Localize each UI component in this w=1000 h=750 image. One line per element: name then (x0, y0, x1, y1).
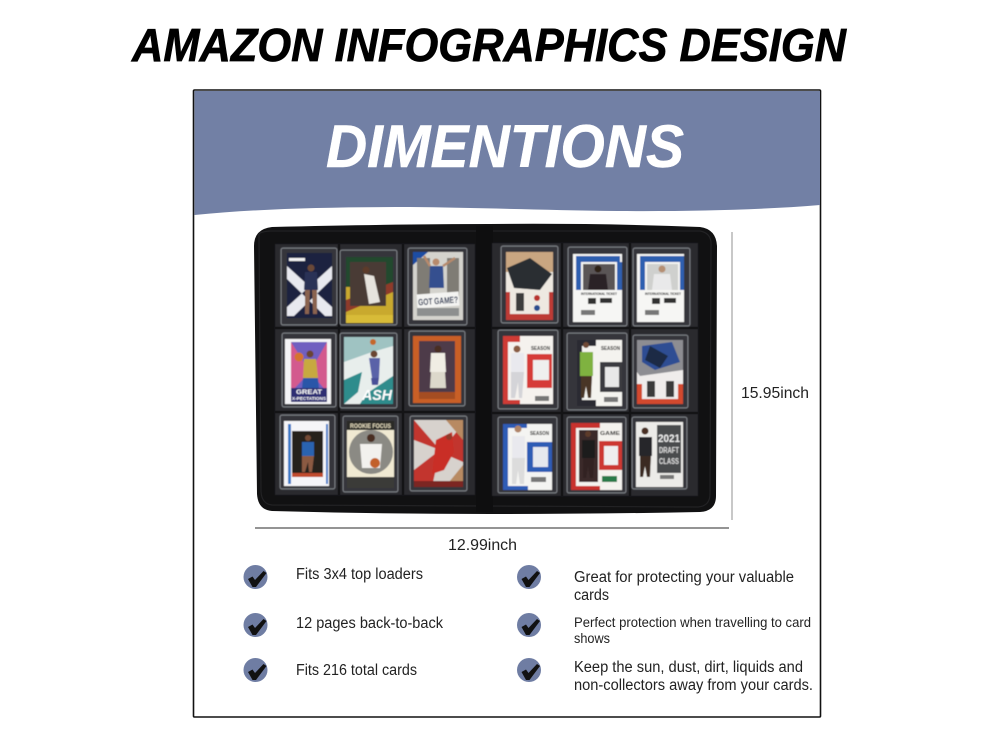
card r3c5: GAME (600, 431, 621, 437)
card r2c1: X-PECTATIONS (292, 396, 326, 401)
card r3c6 (632, 417, 687, 489)
card r1c4 (501, 246, 558, 323)
panel: dimensions card (194, 90, 820, 717)
feature: protecting: Great for protecting your valuable (574, 569, 794, 586)
card r2c2 (340, 333, 397, 408)
card r3c6: 2021 (658, 433, 680, 445)
card r3c3 (410, 416, 467, 491)
card r3c4 (498, 417, 557, 493)
right page sleeves (492, 243, 698, 496)
feature: keep away (574, 659, 813, 694)
feature: travelling: Perfect protection when travelling to card (574, 614, 811, 630)
height label: 15.95inch (741, 385, 809, 402)
card r2c6 (633, 335, 688, 408)
card r1c6 (633, 248, 690, 326)
feature: travelling (574, 614, 811, 646)
feature list (244, 565, 813, 694)
card r2c1 (282, 333, 336, 407)
width label: 12.99inch (448, 537, 517, 554)
icon: check 6 (517, 658, 541, 682)
icon: check 3 (244, 658, 268, 682)
binder case (254, 224, 717, 514)
feature: keep away: Keep the sun, dust, dirt, liquids and (574, 659, 803, 676)
feature: pages: 12 pages back-to-back (296, 615, 443, 632)
card r3c4: SEASON (530, 431, 549, 437)
height dimension line (731, 232, 733, 520)
feature: total cards: Fits 216 total cards (296, 662, 417, 679)
card r1c2 (340, 250, 397, 325)
icon: check 4 (517, 565, 541, 589)
card r1c6: INTERNATIONAL TICKET (645, 292, 682, 296)
title: AMAZON INFOGRAPHICS DESIGN (131, 19, 847, 71)
card r2c4 (498, 330, 558, 409)
card r1c1 (281, 248, 337, 325)
card r2c1: GREAT (296, 390, 322, 396)
binder photo (254, 224, 717, 514)
card r3c5 (567, 417, 626, 493)
feature: protecting (574, 569, 794, 604)
card r3c2: ROOKIE FOCUS (350, 424, 391, 430)
icon: check 5 (517, 613, 541, 637)
card r1c5: INTERNATIONAL TICKET (581, 292, 618, 296)
feature: protecting: cards (574, 587, 609, 604)
feature: travelling: shows (574, 630, 610, 646)
card r2c5: SEASON (601, 346, 620, 352)
card r2c4: SEASON (531, 346, 550, 352)
card r2c5 (567, 333, 627, 410)
card r3c6: DRAFT (659, 446, 679, 455)
width dimension line (255, 527, 729, 529)
icon: check 1 (244, 565, 268, 589)
feature: keep away: non-collectors away from your cards. (574, 677, 813, 694)
card r1c3: GOT GAME? (418, 295, 458, 307)
binder spine (476, 226, 493, 512)
card r2c2: ASH (361, 387, 393, 404)
header band (194, 91, 820, 215)
card r1c3 (408, 248, 467, 325)
card r3c1 (280, 415, 335, 489)
icon: check 2 (244, 613, 268, 637)
card r1c5 (568, 247, 627, 326)
card r3c6: CLASS (659, 457, 679, 466)
feature: top loaders: Fits 3x4 top loaders (296, 566, 423, 583)
card r3c2 (343, 416, 398, 492)
card r2c3 (409, 331, 465, 406)
left page sleeves (275, 244, 475, 495)
heading: DIMENTIONS (326, 113, 684, 180)
